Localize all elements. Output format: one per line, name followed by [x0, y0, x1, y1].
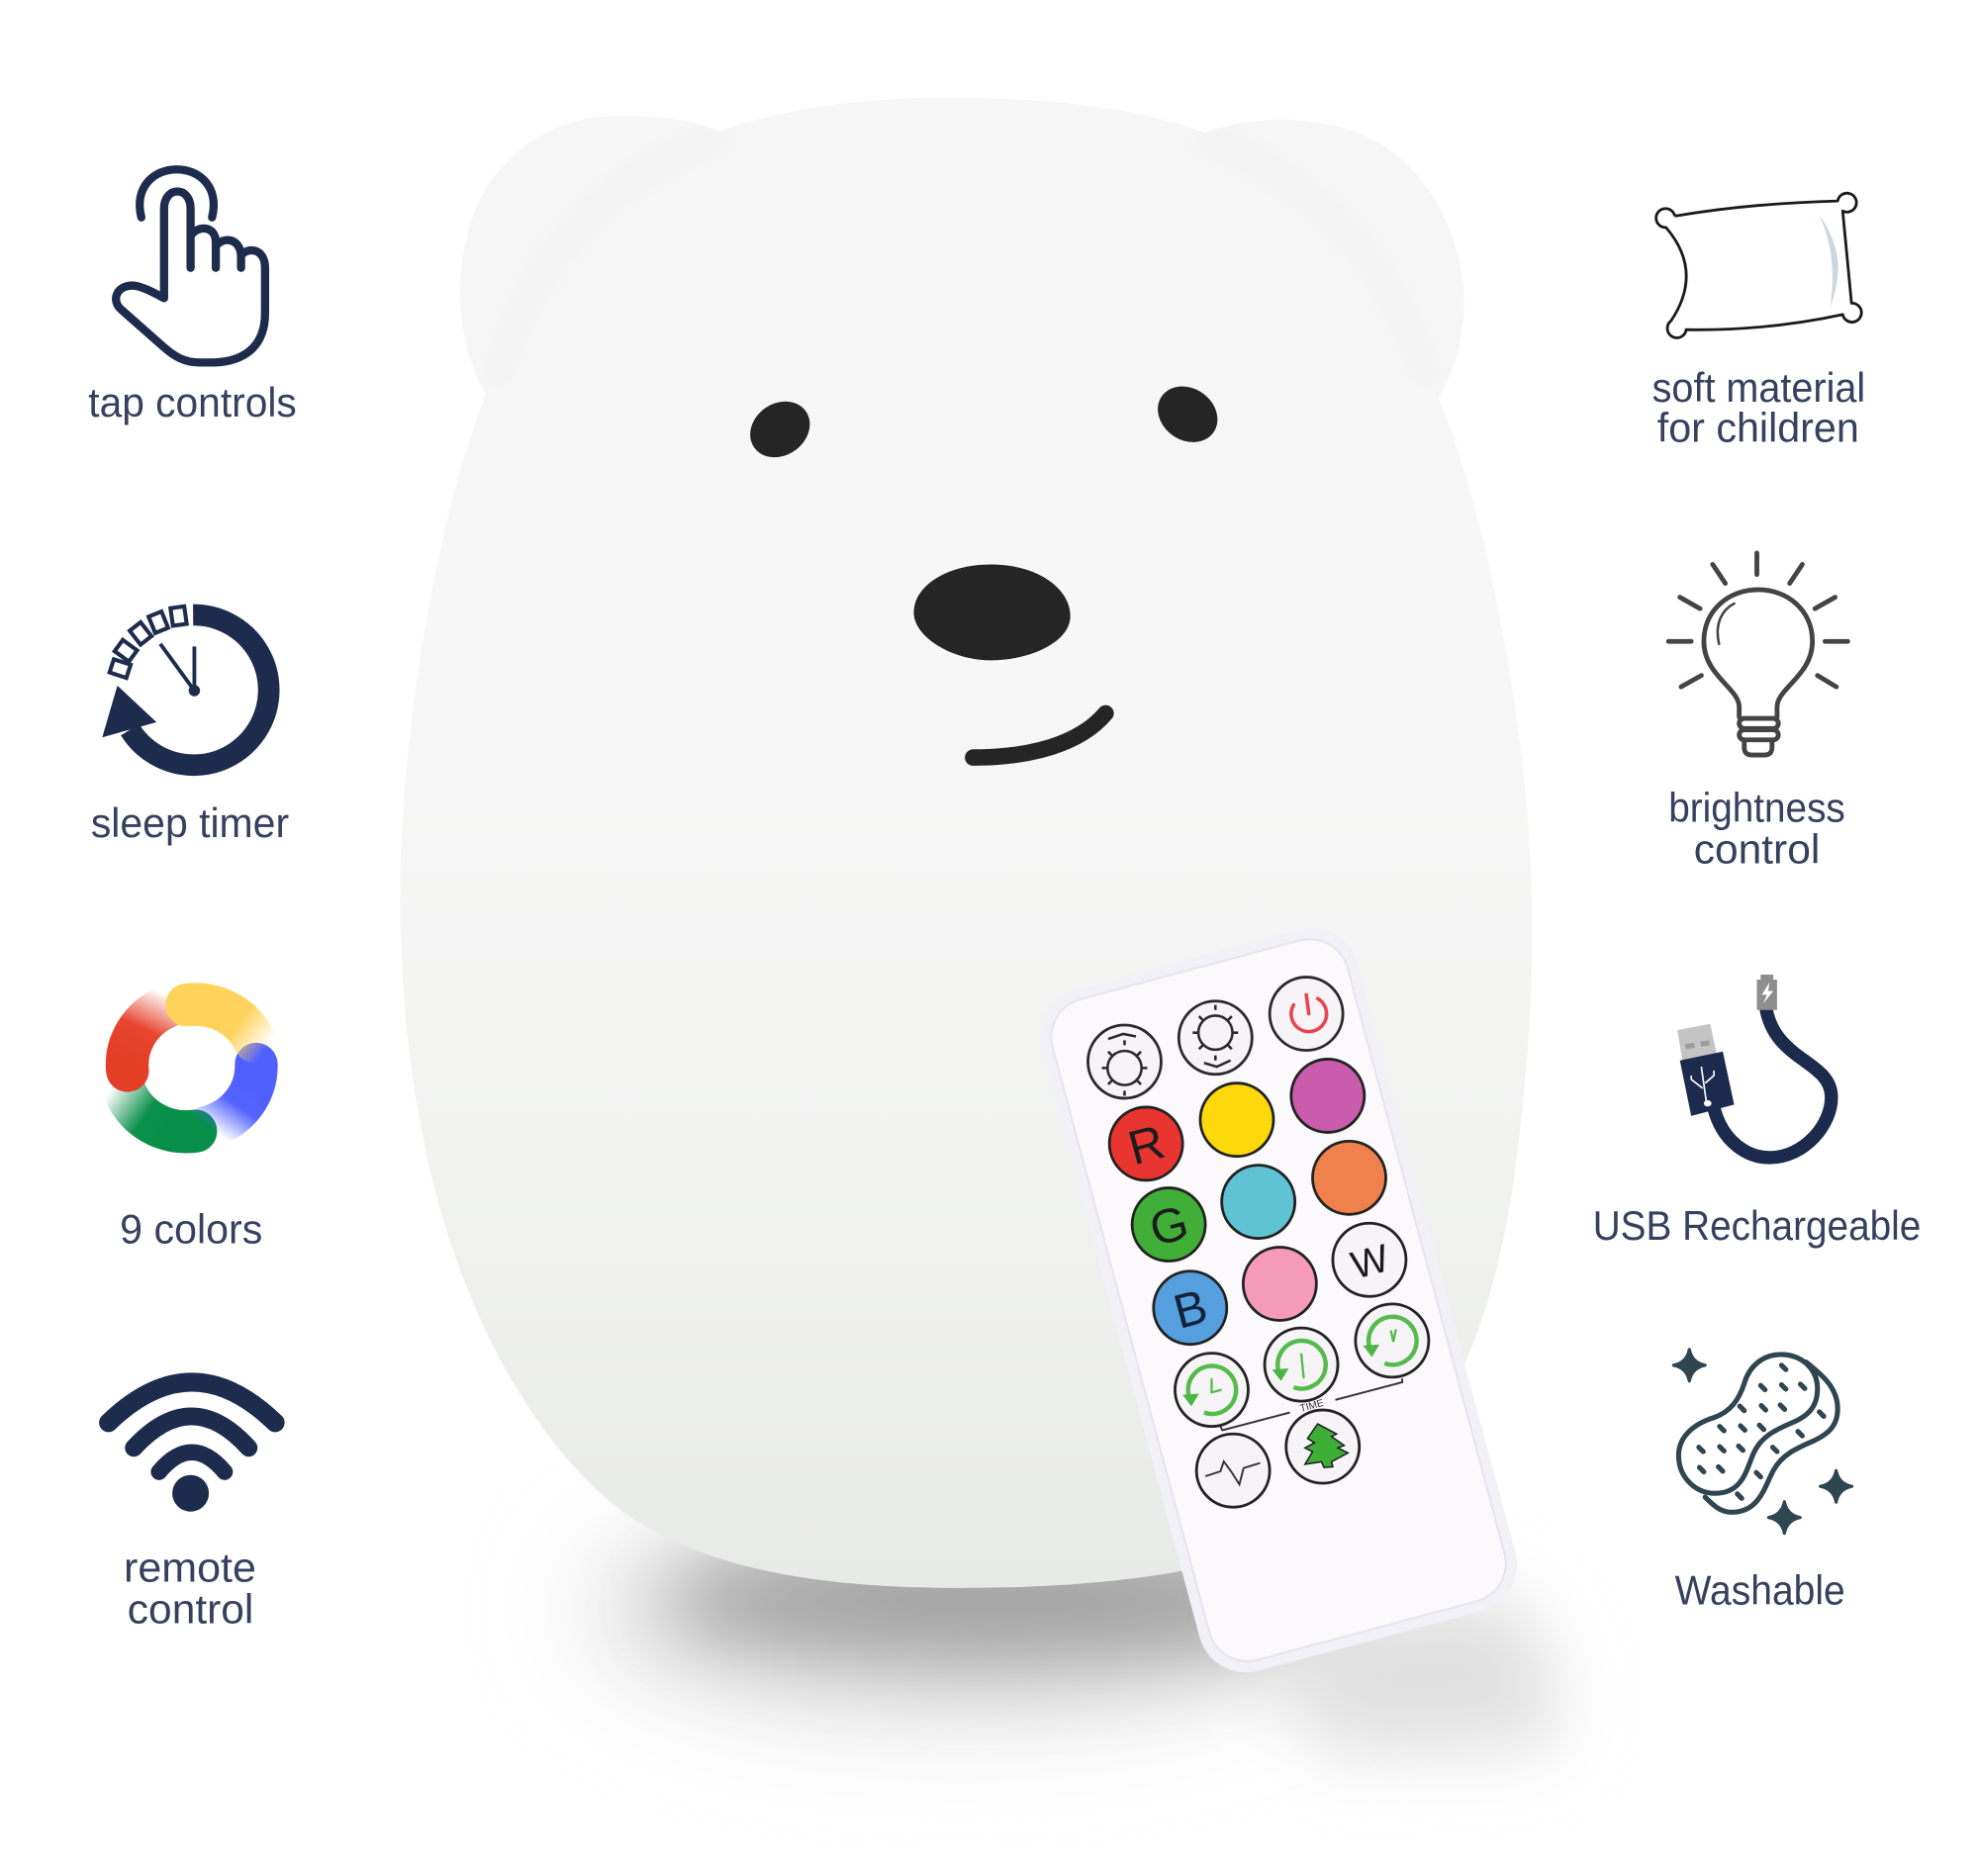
pulse button: [1196, 1434, 1270, 1507]
time bracket: TIME: [1299, 1398, 1325, 1415]
icon: sleep timer: [102, 607, 269, 765]
label: soft material for children: [1652, 364, 1865, 451]
time bracket: [1220, 1378, 1402, 1430]
button G: G: [1144, 1195, 1194, 1257]
button R: R: [1123, 1115, 1171, 1175]
remote control: [1029, 917, 1528, 1683]
icon: soft pillow: [1656, 193, 1861, 337]
icon: brightness bulb: [1668, 553, 1847, 755]
label: brightness control: control: [1694, 826, 1820, 873]
bear lamp: [401, 98, 1532, 1588]
left eye: [739, 390, 820, 469]
buttons row 1: dial up: [1178, 1001, 1252, 1075]
label: brightness control: brightness: [1668, 785, 1845, 831]
timer button 2: [1265, 1328, 1338, 1401]
button B: [1154, 1271, 1227, 1345]
button B: B: [1169, 1279, 1213, 1340]
right eye: [1147, 375, 1228, 453]
label: remote control: remote: [124, 1545, 256, 1591]
tree button: [1286, 1410, 1360, 1483]
label: remote control: [124, 1545, 256, 1633]
button pink: [1243, 1247, 1316, 1320]
remote body: [1029, 917, 1528, 1683]
button R: [1109, 1107, 1182, 1180]
button G: [1132, 1188, 1205, 1262]
button magenta: [1291, 1059, 1365, 1132]
label: 9 colors: 9 colors: [120, 1206, 262, 1253]
label: tap controls: tap controls: [88, 379, 297, 425]
timer button 1: [1176, 1354, 1248, 1427]
buttons row 1: power: [1270, 978, 1343, 1051]
label: soft material for children: soft material: [1652, 364, 1865, 411]
icon: remote control wifi: [109, 1382, 275, 1512]
label: brightness control: [1668, 785, 1845, 873]
buttons row 1: dial down: [1087, 1025, 1161, 1098]
bear body: [401, 98, 1532, 1588]
mouth: [973, 713, 1105, 758]
icon: tap controls: [116, 169, 265, 362]
timer button 3: [1356, 1304, 1429, 1377]
button W: W: [1347, 1236, 1394, 1288]
button yellow: [1200, 1083, 1273, 1157]
floor shadow: [581, 1489, 1558, 1754]
button teal: [1222, 1166, 1295, 1239]
label: remote control: control: [128, 1586, 253, 1633]
nose: [913, 564, 1071, 660]
icon: 9 colors: [124, 1004, 256, 1132]
label: usb rechargeable: USB Rechargeable: [1593, 1202, 1921, 1249]
label: washable: Washable: [1675, 1566, 1845, 1613]
label: sleep timer: sleep timer: [91, 799, 289, 846]
button W: [1333, 1223, 1406, 1296]
button orange: [1313, 1141, 1386, 1214]
icon: usb cable: [1677, 975, 1832, 1158]
label: soft material for children: for children: [1657, 405, 1859, 451]
icon: washable sponge: [1673, 1350, 1852, 1534]
